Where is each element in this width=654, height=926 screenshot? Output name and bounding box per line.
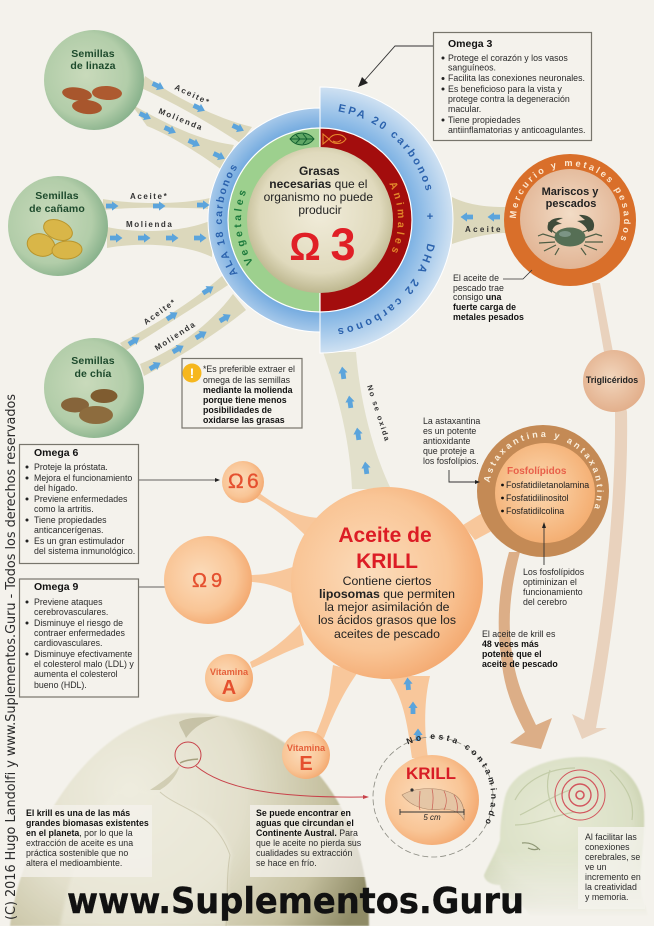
text panel: biomasa: El krill es una de las más (26, 808, 130, 818)
note: metales pesados: metales pesados (453, 312, 524, 322)
seed: cañamo: Semillas (35, 190, 79, 202)
text panel: biomasa: altera el medioambiente. (26, 858, 122, 868)
central text: producir (298, 203, 342, 217)
note: fosfolípidos: del cerebro (523, 597, 567, 607)
callout: omega 9: Disminuye el riesgo de (34, 618, 123, 628)
note: astaxantina: los fosfolípios. (423, 456, 479, 466)
mariscos y pescados (504, 154, 636, 286)
beam labels: Molienda (126, 220, 173, 229)
arrow: omega 9 (139, 585, 177, 589)
callout: omega 9 (20, 579, 138, 697)
note: astaxantina: que proteje a (423, 446, 474, 456)
text panel: continente austral: Se puede encontrar en (256, 808, 351, 818)
text panel: continente austral: que le aceite no pierda sus (256, 838, 362, 848)
ring labels: ALA 18 carbonos (216, 165, 238, 275)
seed: linaza: de linaza (70, 60, 116, 72)
bubble: aceite de krill: aceites de pescado (334, 627, 440, 641)
blue ring: animal half (320, 87, 453, 353)
bubble: vitamina A: A (222, 677, 236, 699)
callout: omega 9: Previene ataques (34, 597, 103, 607)
astaxantina / fosfolípidos: Fosfatidiletanolamina (506, 480, 589, 490)
note: 48 veces: potente que el (482, 649, 542, 659)
icon: krill shrimp: 5 cm (423, 813, 441, 822)
text panel: biomasa (19, 805, 152, 877)
warning note: *Es preferible extraer el (203, 364, 295, 374)
callout: omega 6: Mejora el funcionamiento (34, 473, 132, 483)
astaxantina / fosfolípidos: Fosfolípidos (507, 466, 567, 477)
triglicéridos: Triglicéridos (586, 375, 638, 385)
note: fosfolípidos: Los fosfolípidos (523, 567, 585, 577)
main omega 3 circle: DHA 22 carbonos (338, 244, 435, 334)
central text: necesarias que el (269, 177, 367, 191)
callout: omega 6: Es un gran estimulador (34, 536, 125, 546)
callout: omega 6: Omega 6 (34, 447, 79, 459)
beams from seeds to omega 3 circle (103, 76, 506, 489)
text panel: continente austral: se hace en frío. (256, 858, 317, 868)
text panel: cerebro: la creatividad (585, 882, 637, 892)
note: 48 veces: aceite de pescado (482, 659, 558, 669)
bubble: vitamina E (282, 731, 330, 779)
text panel: continente austral (250, 805, 368, 877)
arrow: omega 3 callout to circle (358, 46, 433, 87)
note: metales pesados: El aceite de (453, 273, 499, 283)
text panel: cerebro: y memoria. (585, 892, 629, 902)
icon: fish (323, 134, 346, 144)
astaxantina / fosfolípidos: Fosfatidilinositol (506, 493, 569, 503)
callout: omega 9: cerebrovasculares. (34, 607, 108, 617)
bubble: vitamina E: E (299, 753, 313, 775)
warning note: omega de las semillas (203, 375, 291, 385)
krill circle (372, 734, 497, 858)
text panel: biomasa: grandes biomasas existentes (26, 818, 149, 828)
main omega 3 circle: Vegetales (234, 190, 252, 266)
bubble: omega 6: Ω (228, 470, 244, 493)
note: metales pesados: fuerte carga de (453, 302, 516, 312)
bubble: omega 9: Ω (192, 570, 207, 592)
bubble: aceite de krill: Contiene ciertos (343, 574, 431, 588)
note: astaxantina: La astaxantina (423, 416, 480, 426)
flow arrows (106, 79, 500, 741)
warning note: porque tiene menos (203, 395, 287, 405)
seed: chía (44, 338, 144, 438)
beam labels: Aceite* (130, 192, 168, 201)
main omega 3 circle: + (427, 211, 433, 223)
note: astaxantina: antioxidante (423, 436, 471, 446)
beam labels: Molienda (157, 107, 205, 133)
seed: chía: Semillas (71, 355, 115, 367)
krill tendrils (250, 492, 503, 758)
warning note: oxidarse las grasas (203, 415, 285, 425)
text panel: cerebro (578, 827, 645, 909)
red half ring (320, 128, 412, 312)
callout: omega 6: Tiene propiedades (34, 515, 107, 525)
text panel: cerebro: ve un (585, 862, 607, 872)
head with brain (484, 756, 645, 909)
blue ring: vegetal half (208, 108, 320, 332)
beam labels: No se oxida (365, 384, 392, 443)
callout: omega 9: el colesterol malo (LDL) y (34, 659, 134, 669)
callout: omega 9: cardiovasculares. (34, 638, 102, 648)
beam labels: Aceite (465, 225, 503, 234)
note: fosfolípidos: optiminizan el (523, 577, 577, 587)
mariscos y pescados: pescados (546, 198, 596, 210)
krill circle: KRILL (406, 764, 456, 783)
mariscos y pescados: Mercurio y metales pesados (510, 161, 631, 241)
bubble: vitamina A (205, 654, 253, 702)
arrow: omega 6 (139, 478, 220, 482)
note: metales pesados (453, 270, 532, 322)
bubble: aceite de krill: los ácidos grasos que los (318, 613, 456, 627)
bubble: omega 6 (222, 461, 264, 503)
callout: omega 6: del sistema inmunológico. (34, 546, 135, 556)
warning note: posibilidades de (203, 405, 272, 415)
green half ring (228, 128, 320, 312)
text panel: biomasa: extracción de aceite es una (26, 838, 133, 848)
callout: omega 6: del hígado. (34, 483, 78, 493)
main omega 3 circle (208, 86, 454, 354)
callout: omega 6: Previene enfermedades (34, 494, 128, 504)
callout: omega 9: Omega 9 (34, 581, 79, 593)
text panel: continente austral: Continente Austral. Para (256, 828, 358, 838)
seed: chía: de chía (75, 368, 111, 380)
callout: omega 9: bueno (HDL). (34, 680, 87, 690)
mariscos y pescados: Mariscos y (542, 186, 599, 198)
bubble: vitamina A: Vitamina (210, 667, 249, 677)
callout: omega 3: Protege el corazón y los vasos (448, 53, 568, 63)
astaxantina / fosfolípidos (477, 425, 609, 557)
website title: www.Suplementos.Guru (67, 881, 524, 922)
central text: Grasas (299, 164, 340, 178)
callout: omega 9: Disminuye efectivamente (34, 649, 132, 659)
callout: omega 9: contraer enfermedades (34, 628, 126, 638)
bubble: aceite de krill: Aceite de (338, 524, 432, 547)
omega 3 symbol: Ω (289, 226, 321, 269)
note: fosfolípidos: funcionamiento (523, 587, 583, 597)
note: metales pesados: pescado trae (453, 283, 504, 293)
main omega 3 circle: Animales (389, 183, 405, 253)
text panel: cerebro: incremento en (585, 872, 641, 882)
beam labels: Aceite* (173, 83, 212, 107)
astaxantina / fosfolípidos: Astaxantina y antaxantina (484, 432, 604, 509)
bubble: aceite de krill: KRILL (356, 550, 418, 573)
callout: omega 3: Tiene propiedades (448, 115, 521, 125)
triglicéridos (583, 350, 645, 412)
text panel: cerebro: conexiones (585, 842, 630, 852)
beam labels: Aceite* (142, 297, 178, 327)
text panel: biomasa: en el planeta, por lo que la (26, 828, 133, 838)
beam labels: Molienda (153, 319, 198, 353)
callout: omega 3: Facilita las conexiones neuronales. (448, 73, 585, 83)
bubble: aceite de krill: liposomas que permiten (319, 587, 455, 601)
note: astaxantina: es un potente (423, 426, 476, 436)
seed: linaza: Semillas (71, 48, 115, 60)
red marker and curve on globe (175, 742, 369, 799)
callout: omega 3: protege contra la degeneración (448, 94, 570, 104)
note: metales pesados: consigo una (453, 292, 501, 302)
callout: omega 3: antiinflamatorias y anticoagulantes. (448, 125, 585, 135)
bubble: omega 9: 9 (211, 570, 222, 592)
warning note: mediante la molienda (203, 385, 293, 395)
globe (10, 713, 369, 926)
icon: warning: ! (190, 365, 194, 381)
seed: linaza (44, 30, 144, 130)
main omega 3 circle: EPA 20 carbonos (338, 104, 432, 190)
bubble: aceite de krill (291, 487, 483, 679)
side credit: (C) 2016 Hugo Landolfi y www.Suplementos.Guru - Todos los derechos reservados (3, 394, 19, 920)
seed: cañamo: de cañamo (29, 203, 85, 215)
bubble: aceite de krill: la mejor asimilación de (324, 600, 450, 614)
callout: omega 3: sanguíneos. (448, 62, 496, 72)
omega 3 symbol: 3 (330, 219, 356, 270)
beam labels (126, 83, 503, 443)
callout: omega 3: macular. (448, 104, 481, 114)
text panel: continente austral: aguas que circundan el (256, 818, 354, 828)
callout: omega 6: como la artritis. (34, 504, 94, 514)
central text: organismo no puede (264, 190, 373, 204)
text panel: cerebro: cerebrales, se (585, 852, 640, 862)
callout: omega 3: Es beneficioso para la vista y (448, 84, 563, 94)
note: 48 veces: 48 veces más (482, 639, 539, 649)
text panel: biomasa: práctica sostenible que no (26, 848, 128, 858)
callout: omega 3 (434, 32, 592, 140)
icon: brain activity rings (555, 770, 605, 820)
bubble: vitamina E: Vitamina (287, 743, 326, 753)
note: fosfolípidos (523, 522, 585, 607)
callout: omega 6: Proteje la próstata. (34, 462, 108, 472)
callout: omega 3: Omega 3 (448, 38, 493, 50)
note: astaxantina (423, 416, 480, 484)
warning note (182, 358, 302, 428)
inner disc (247, 147, 393, 293)
icon: crab (538, 215, 603, 255)
callout: omega 6: anticancerígenas. (34, 525, 103, 535)
tan arrow: astaxantina to brain (499, 552, 552, 749)
bubble: omega 6: 6 (247, 470, 259, 493)
callout: omega 6 (20, 444, 138, 564)
light arrow: mariscos to brain (572, 283, 627, 739)
text panel: cerebro: Al facilitar las (585, 832, 637, 842)
krill circle: No esta contaminado (406, 734, 497, 824)
note: 48 veces: El aceite de krill es (482, 629, 556, 639)
seed: cañamo (8, 176, 108, 276)
callout: omega 9: aumenta el colesterol (34, 669, 118, 679)
astaxantina / fosfolípidos: Fosfatidilcolina (506, 506, 564, 516)
bubble: omega 9 (164, 536, 252, 624)
text panel: continente austral: cualidades su extracción (256, 848, 352, 858)
icon: leaf (290, 133, 314, 145)
